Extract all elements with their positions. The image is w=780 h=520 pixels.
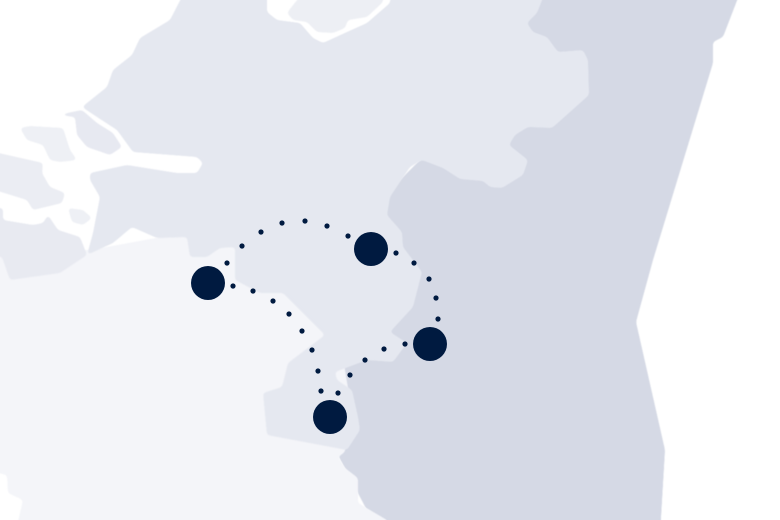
region: central medium land [82, 0, 589, 450]
delta islands [0, 110, 122, 280]
marker: north-east stop [354, 232, 388, 266]
marker: east stop [413, 327, 447, 361]
region: lightest south-west land [0, 230, 395, 520]
marker: west stop [191, 266, 225, 300]
island: south delta [0, 208, 87, 280]
island: upper west [20, 126, 77, 162]
island: west [0, 150, 65, 210]
island: north delta [57, 110, 122, 155]
route: dotted path [224, 218, 441, 396]
region: eastern dark land [330, 0, 743, 520]
northern lagoon ring [267, 0, 392, 43]
island: small inner [68, 208, 92, 225]
stop markers [191, 232, 447, 434]
marker: south stop [313, 400, 347, 434]
northern lagoon island [287, 0, 383, 33]
